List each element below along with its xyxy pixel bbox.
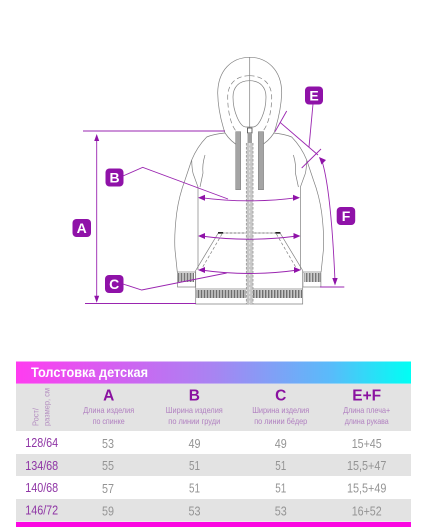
- row axis label: размер, см: [42, 388, 52, 426]
- table row 134/68: 15,5+47: [347, 459, 386, 473]
- badge F: [337, 207, 355, 225]
- table row 134/68: 51: [189, 459, 200, 473]
- garment: left half of body and sleeve: [175, 133, 249, 304]
- measure B: chest width: [123, 167, 300, 201]
- table row 134/68: 51: [275, 459, 286, 473]
- badge F: F: [342, 208, 351, 224]
- table row 140/68: 57: [102, 482, 114, 496]
- column C header: Ширина изделия: [252, 405, 309, 415]
- row axis label: [32, 388, 52, 426]
- measure C: hip width: [123, 233, 301, 290]
- table row 128/64: 15+45: [352, 437, 382, 451]
- column E+F header: Длина плеча+: [343, 405, 390, 415]
- garment: right half of body and sleeve: [249, 133, 324, 304]
- column C header: C: [275, 388, 286, 405]
- garment: hoodie technical drawing: [175, 57, 324, 304]
- column B header: B: [189, 388, 200, 405]
- table row 140/68: [25, 481, 386, 496]
- zipper: [246, 128, 253, 304]
- badge A: A: [77, 220, 87, 236]
- measure F: sleeve length: [319, 157, 344, 287]
- table row 134/68: 134/68: [25, 459, 58, 473]
- table row 134/68: 55: [102, 459, 114, 473]
- badge C: [105, 275, 124, 293]
- table row 146/72: 59: [102, 504, 114, 518]
- table row 128/64: [25, 436, 382, 451]
- column B header: Ширина изделия: [166, 405, 223, 415]
- badge E: [305, 86, 323, 104]
- table row 128/64: 49: [188, 437, 201, 451]
- table row 128/64: 128/64: [25, 436, 58, 450]
- badge C: C: [109, 276, 119, 292]
- table row 146/72: [16, 499, 411, 522]
- column A header: A: [103, 388, 114, 405]
- table title band: [16, 362, 411, 384]
- table row 134/68: [16, 454, 411, 476]
- table row 128/64: 53: [102, 437, 114, 451]
- table row 146/72: 16+52: [352, 504, 382, 518]
- column A header: [83, 388, 134, 426]
- column A header: по спинке: [93, 416, 125, 426]
- badge B: B: [109, 170, 120, 186]
- size table: [16, 362, 411, 527]
- hood outline: [218, 57, 282, 146]
- table row 140/68: 51: [189, 482, 200, 496]
- measure E: shoulder length: [275, 104, 321, 168]
- table bottom magenta bar: [16, 522, 411, 527]
- table row 140/68: 15,5+49: [347, 482, 386, 496]
- table row 146/72: 146/72: [25, 504, 58, 518]
- column E+F header: длина рукава: [345, 416, 389, 426]
- column B header: по линии груди: [168, 416, 221, 426]
- measurement lines: [83, 104, 344, 304]
- badge B: [106, 168, 124, 186]
- table row 146/72: 53: [188, 504, 201, 518]
- table row 140/68: 140/68: [25, 481, 58, 495]
- column A header: Длина изделия: [83, 405, 134, 415]
- table row 140/68: 51: [275, 482, 286, 496]
- measure A: length: [83, 131, 225, 304]
- table row 146/72: 53: [275, 504, 287, 518]
- column E+F header: [343, 388, 390, 426]
- table row 128/64: 49: [275, 437, 287, 451]
- badge A: [72, 219, 91, 237]
- table title band: Толстовка детская: [31, 365, 148, 380]
- column C header: [252, 388, 309, 426]
- column E+F header: E+F: [352, 388, 381, 405]
- column B header: [166, 388, 223, 426]
- drawstrings: [236, 132, 264, 190]
- badge E: E: [309, 88, 319, 104]
- table header row: [16, 384, 411, 431]
- row axis label: Рост/: [32, 407, 40, 426]
- column C header: по линии бёдер: [254, 416, 308, 426]
